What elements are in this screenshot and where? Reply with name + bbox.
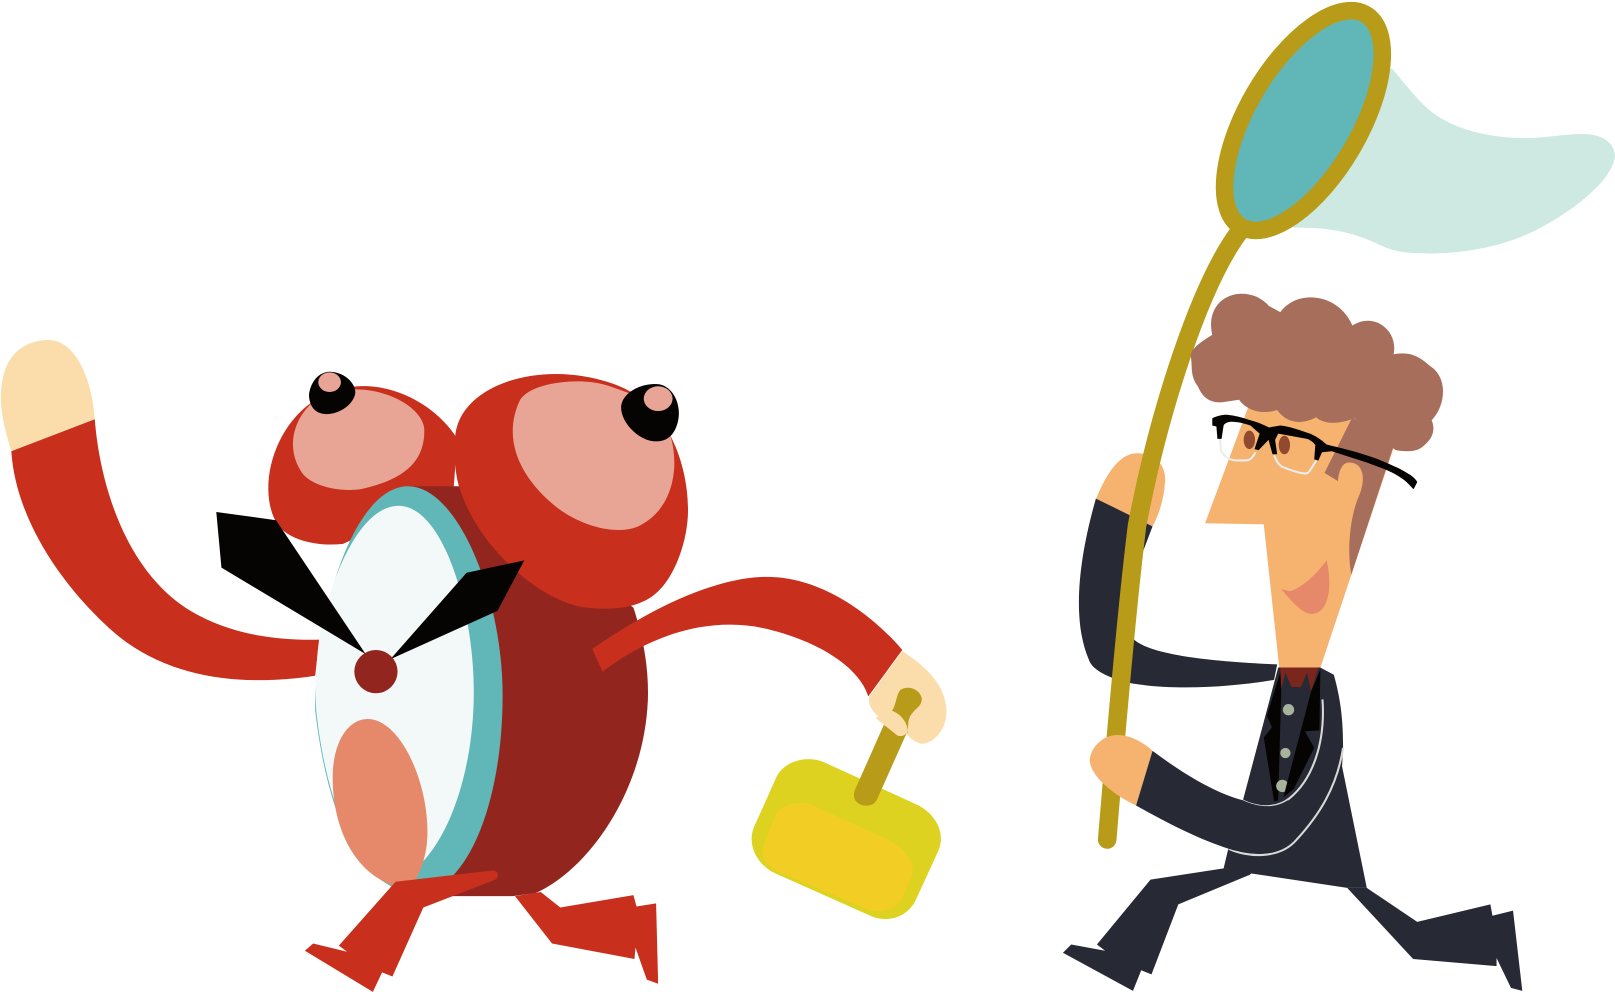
man jacket torso <box>1224 666 1367 888</box>
frog hand gripping handle <box>869 651 947 744</box>
frog arm carrying hammer <box>592 577 902 696</box>
net pole <box>1107 231 1240 839</box>
frog white belly <box>316 506 474 886</box>
frog body <box>407 486 648 896</box>
frog character <box>1 340 947 992</box>
jacket outline strokes <box>1229 699 1343 855</box>
man mouth <box>1281 560 1329 614</box>
frog back leg <box>515 892 658 984</box>
frog teal belly rim <box>315 486 503 888</box>
hammer head <box>752 759 941 919</box>
man with butterfly net <box>1063 0 1615 991</box>
frog bow tie <box>216 512 524 693</box>
frog raised arm <box>1 340 319 680</box>
man far arm <box>1079 453 1277 687</box>
man hair <box>1191 294 1443 575</box>
man glasses and eyes <box>1212 415 1417 489</box>
frog front leg <box>305 870 498 992</box>
frog rear head lobe <box>268 372 457 545</box>
man rear leg <box>1347 888 1522 991</box>
man face and neck <box>1205 407 1395 667</box>
man front leg <box>1063 868 1250 991</box>
net hoop <box>1193 0 1414 255</box>
frog front head lobe <box>455 374 688 609</box>
man near arm and hand <box>1090 735 1296 852</box>
hammer handle <box>854 725 907 806</box>
man collar, vest and buttons <box>1264 667 1320 801</box>
net bag <box>1267 68 1615 253</box>
frog belly patch <box>333 719 427 886</box>
